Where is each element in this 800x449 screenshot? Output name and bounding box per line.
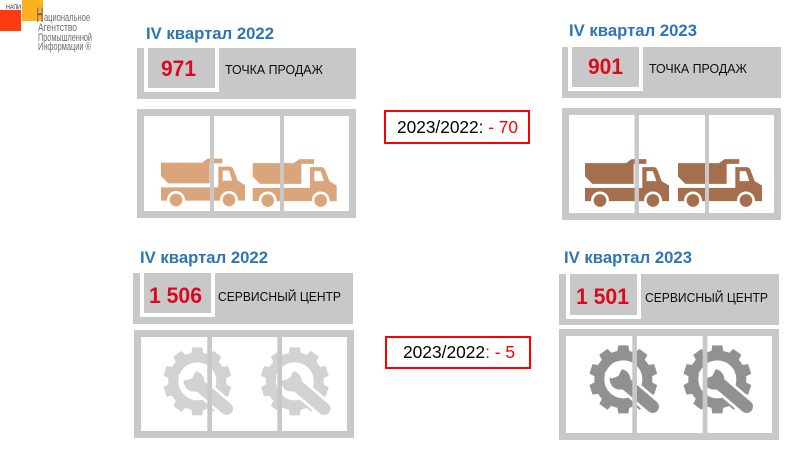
logo: НАПИ xyxy=(6,4,21,11)
header bar: 1 506 service centers: 1 506 xyxy=(149,283,202,308)
callout: sales points change xyxy=(385,111,529,143)
header bar: 971 sales points xyxy=(137,48,356,99)
logo: Н xyxy=(36,4,43,27)
header bar: 901 sales points: ТОЧКА ПРОДАЖ xyxy=(649,62,747,76)
window with gears xyxy=(559,329,779,440)
panel: sales points Q4 2022 xyxy=(137,24,356,218)
logo: ациональное xyxy=(44,12,90,24)
panel: service centers Q4 2023 xyxy=(559,248,779,440)
logo xyxy=(0,0,92,53)
heading: IV quarter 2023: IV квартал 2023 xyxy=(569,21,697,40)
heading: IV quarter 2022: IV квартал 2022 xyxy=(140,248,268,267)
header bar: 971 sales points: 971 xyxy=(161,56,196,81)
window with trucks xyxy=(562,108,781,220)
window with gears xyxy=(134,330,354,438)
logo: Информации ® xyxy=(38,41,91,53)
callout: service centers change: 2023/2022: - 5 xyxy=(403,342,515,362)
callout: sales points change: 2023/2022: - 70 xyxy=(397,117,518,137)
header bar: 1 506 service centers xyxy=(133,273,353,324)
panel: service centers Q4 2022 xyxy=(133,248,354,438)
header bar: 971 sales points: ТОЧКА ПРОДАЖ xyxy=(225,63,323,77)
header bar: 1 501 service centers: СЕРВИСНЫЙ ЦЕНТР xyxy=(645,290,768,305)
header bar: 1 506 service centers: СЕРВИСНЫЙ ЦЕНТР xyxy=(218,289,341,304)
heading: IV quarter 2022: IV квартал 2022 xyxy=(146,24,274,43)
header bar: 901 sales points xyxy=(562,47,781,98)
logo: Агентство xyxy=(38,22,77,34)
header bar: 901 sales points: 901 xyxy=(588,54,623,79)
logo: Промышленной xyxy=(38,32,92,44)
header bar: 1 501 service centers xyxy=(559,274,779,325)
header bar: 1 501 service centers: 1 501 xyxy=(576,284,629,309)
heading: IV quarter 2023: IV квартал 2023 xyxy=(564,248,692,267)
window with trucks xyxy=(137,109,356,218)
panel: sales points Q4 2023 xyxy=(562,21,781,220)
callout: service centers change xyxy=(386,337,530,368)
